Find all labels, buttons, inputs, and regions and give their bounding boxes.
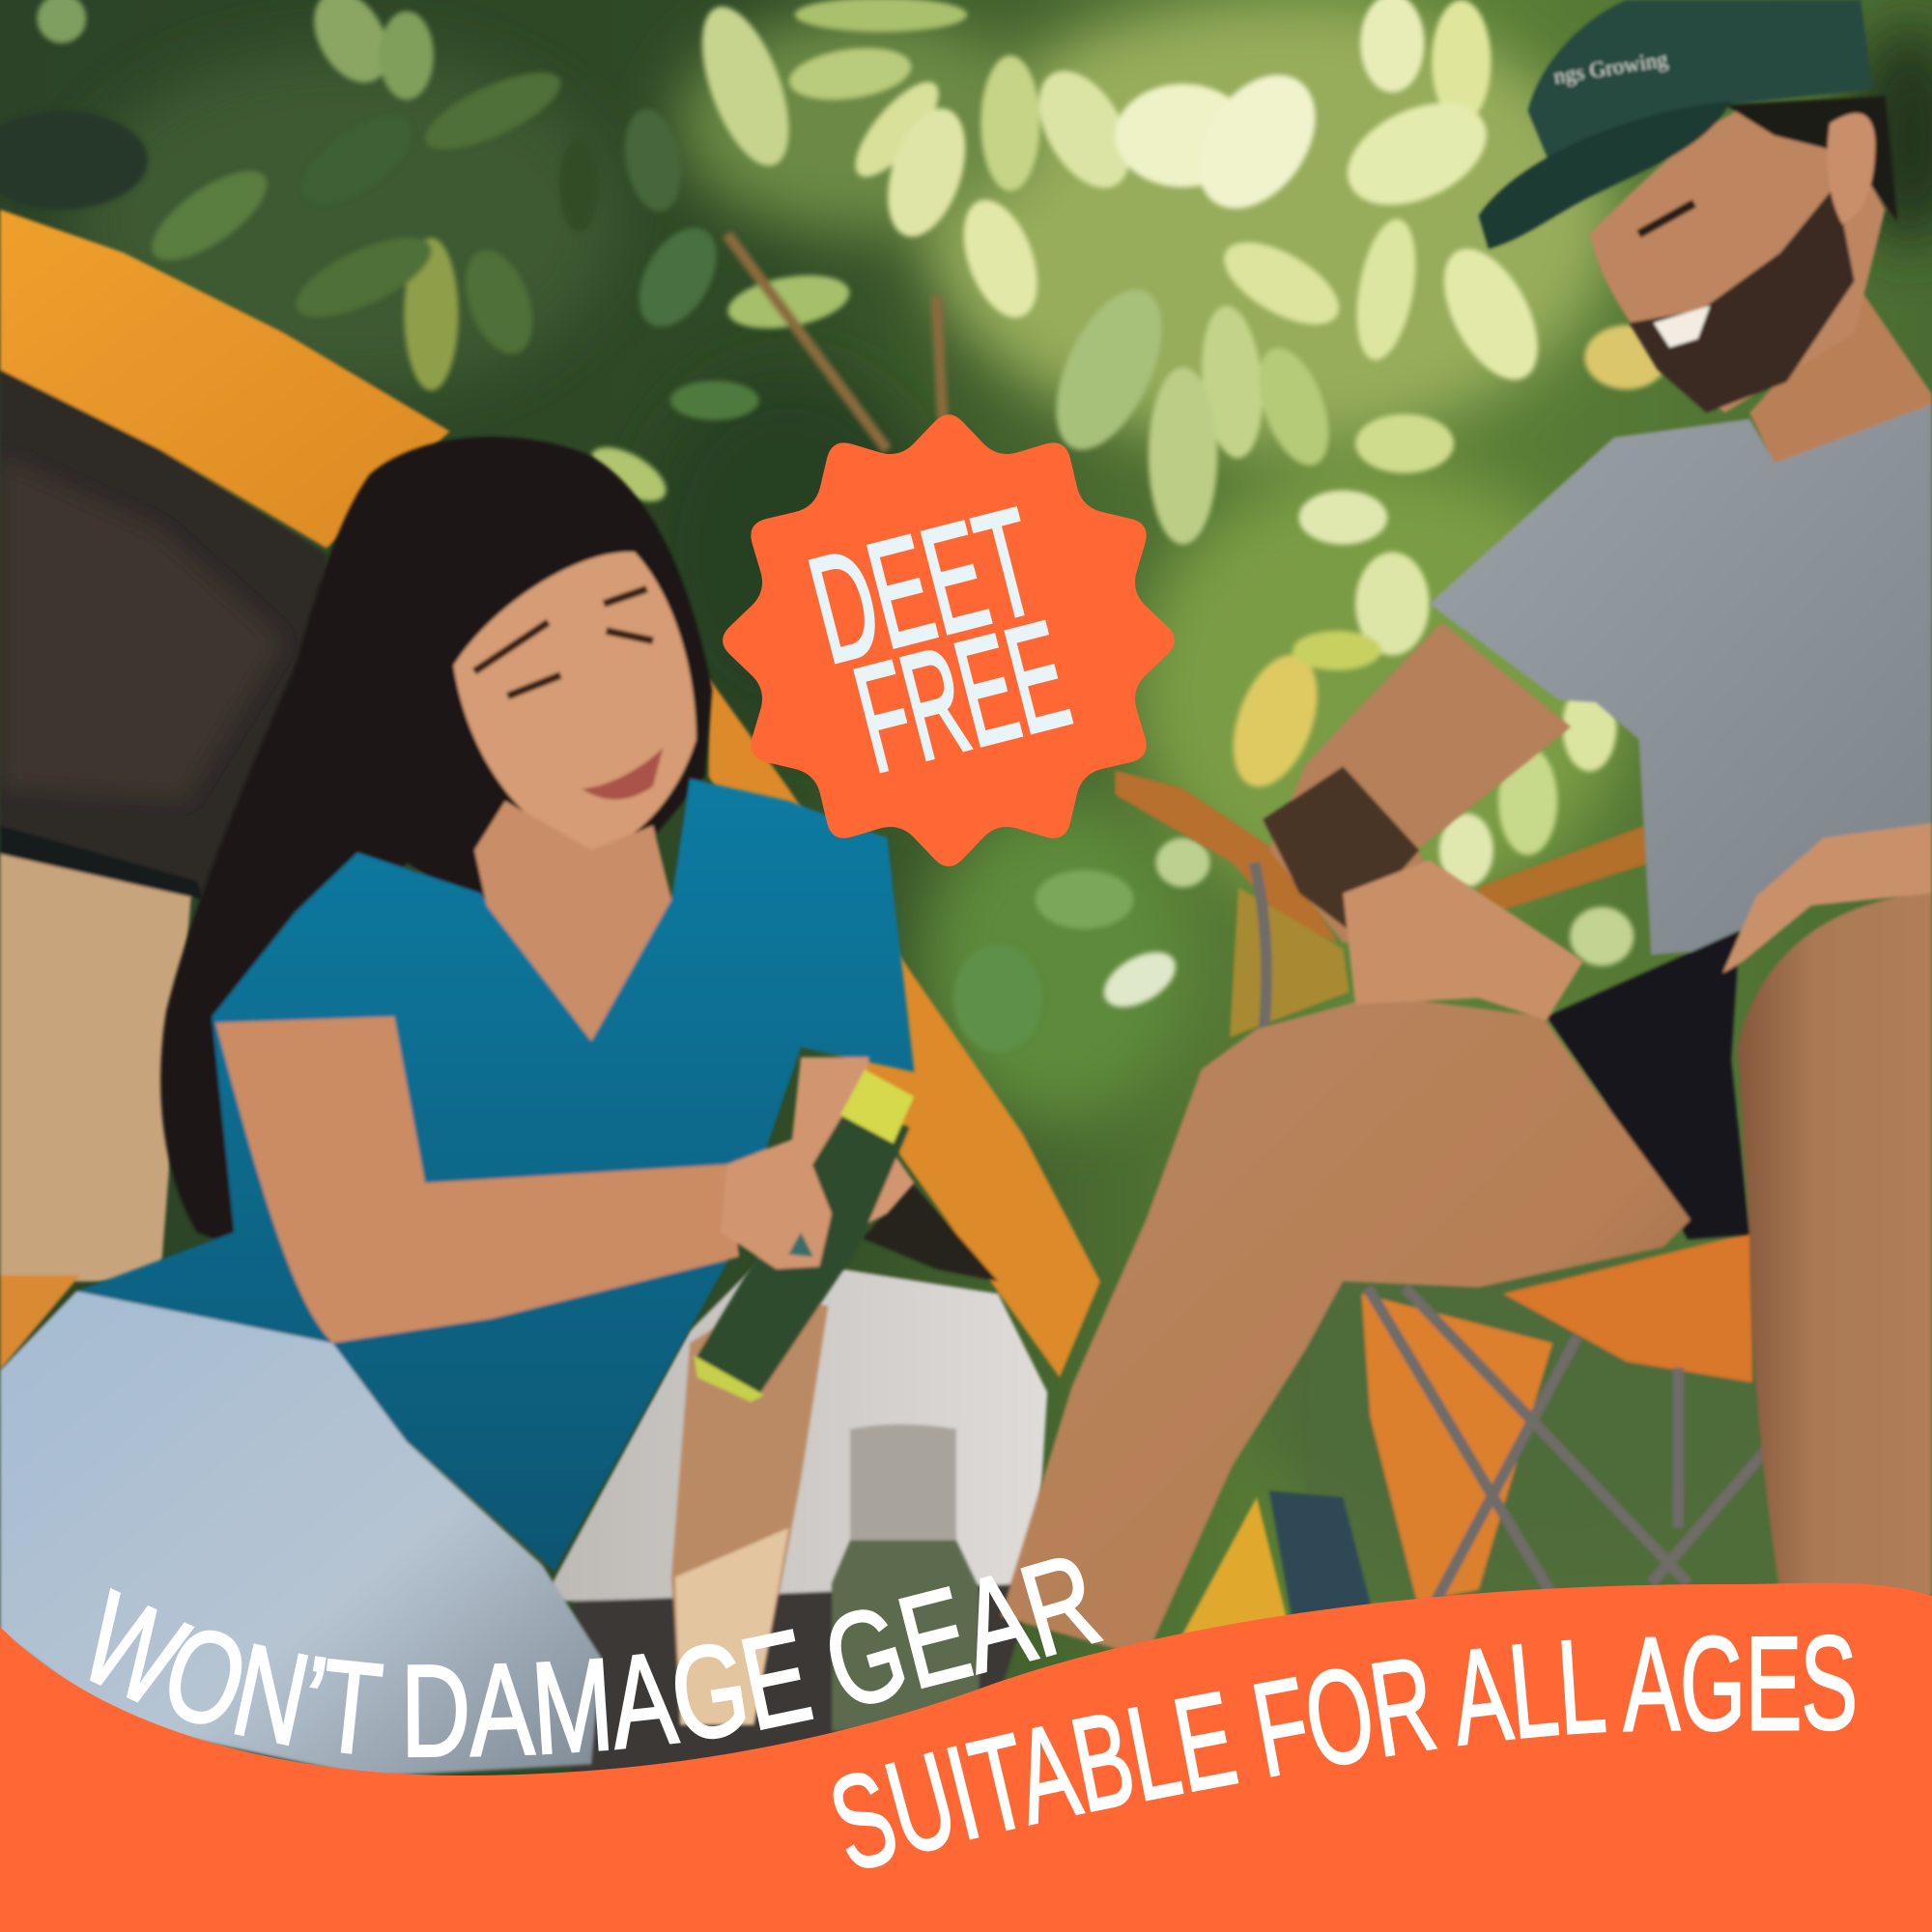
woman: lower arm and knee (671, 1293, 828, 1725)
man: cap (1528, 0, 1873, 185)
man: hands (1343, 860, 1583, 1020)
caption: won't damage gear: WON’T DAMAGE GEAR (90, 1557, 1104, 1758)
cap text: ngs Growing (1552, 46, 1670, 89)
woman: shirt (76, 779, 914, 1571)
man: shirt (1430, 401, 1932, 955)
man: right leg (1737, 894, 1932, 1596)
tent (0, 210, 1100, 1775)
man: hair and ear (1725, 96, 1897, 222)
chair and ground (1115, 770, 1775, 1645)
man: left arm (1269, 622, 1571, 949)
thermos (832, 1424, 980, 1731)
man: thigh and shin (1001, 996, 1690, 1658)
woman (0, 437, 914, 1776)
man: beard (1629, 185, 1855, 412)
man: neck (1749, 290, 1932, 464)
caption: suitable for all ages: SUITABLE FOR ALL AGES (833, 1634, 1855, 1868)
woman: jeans (0, 1292, 601, 1776)
fingers on bottle (721, 1136, 832, 1269)
man: face (1589, 111, 1886, 412)
man (1001, 0, 1932, 1658)
woman: left arm (215, 1016, 739, 1343)
badge text: DEET: DEET (795, 477, 1052, 696)
woman: hair (160, 437, 712, 1257)
orange wave band (0, 1583, 1932, 1932)
right hand behind bottle (788, 1057, 914, 1233)
bottle (694, 1103, 909, 1403)
man: shorts (1547, 930, 1749, 1239)
badge text: FREE: FREE (840, 590, 1084, 805)
badge: deet free (723, 414, 1175, 867)
woman: face and neck (453, 552, 696, 850)
